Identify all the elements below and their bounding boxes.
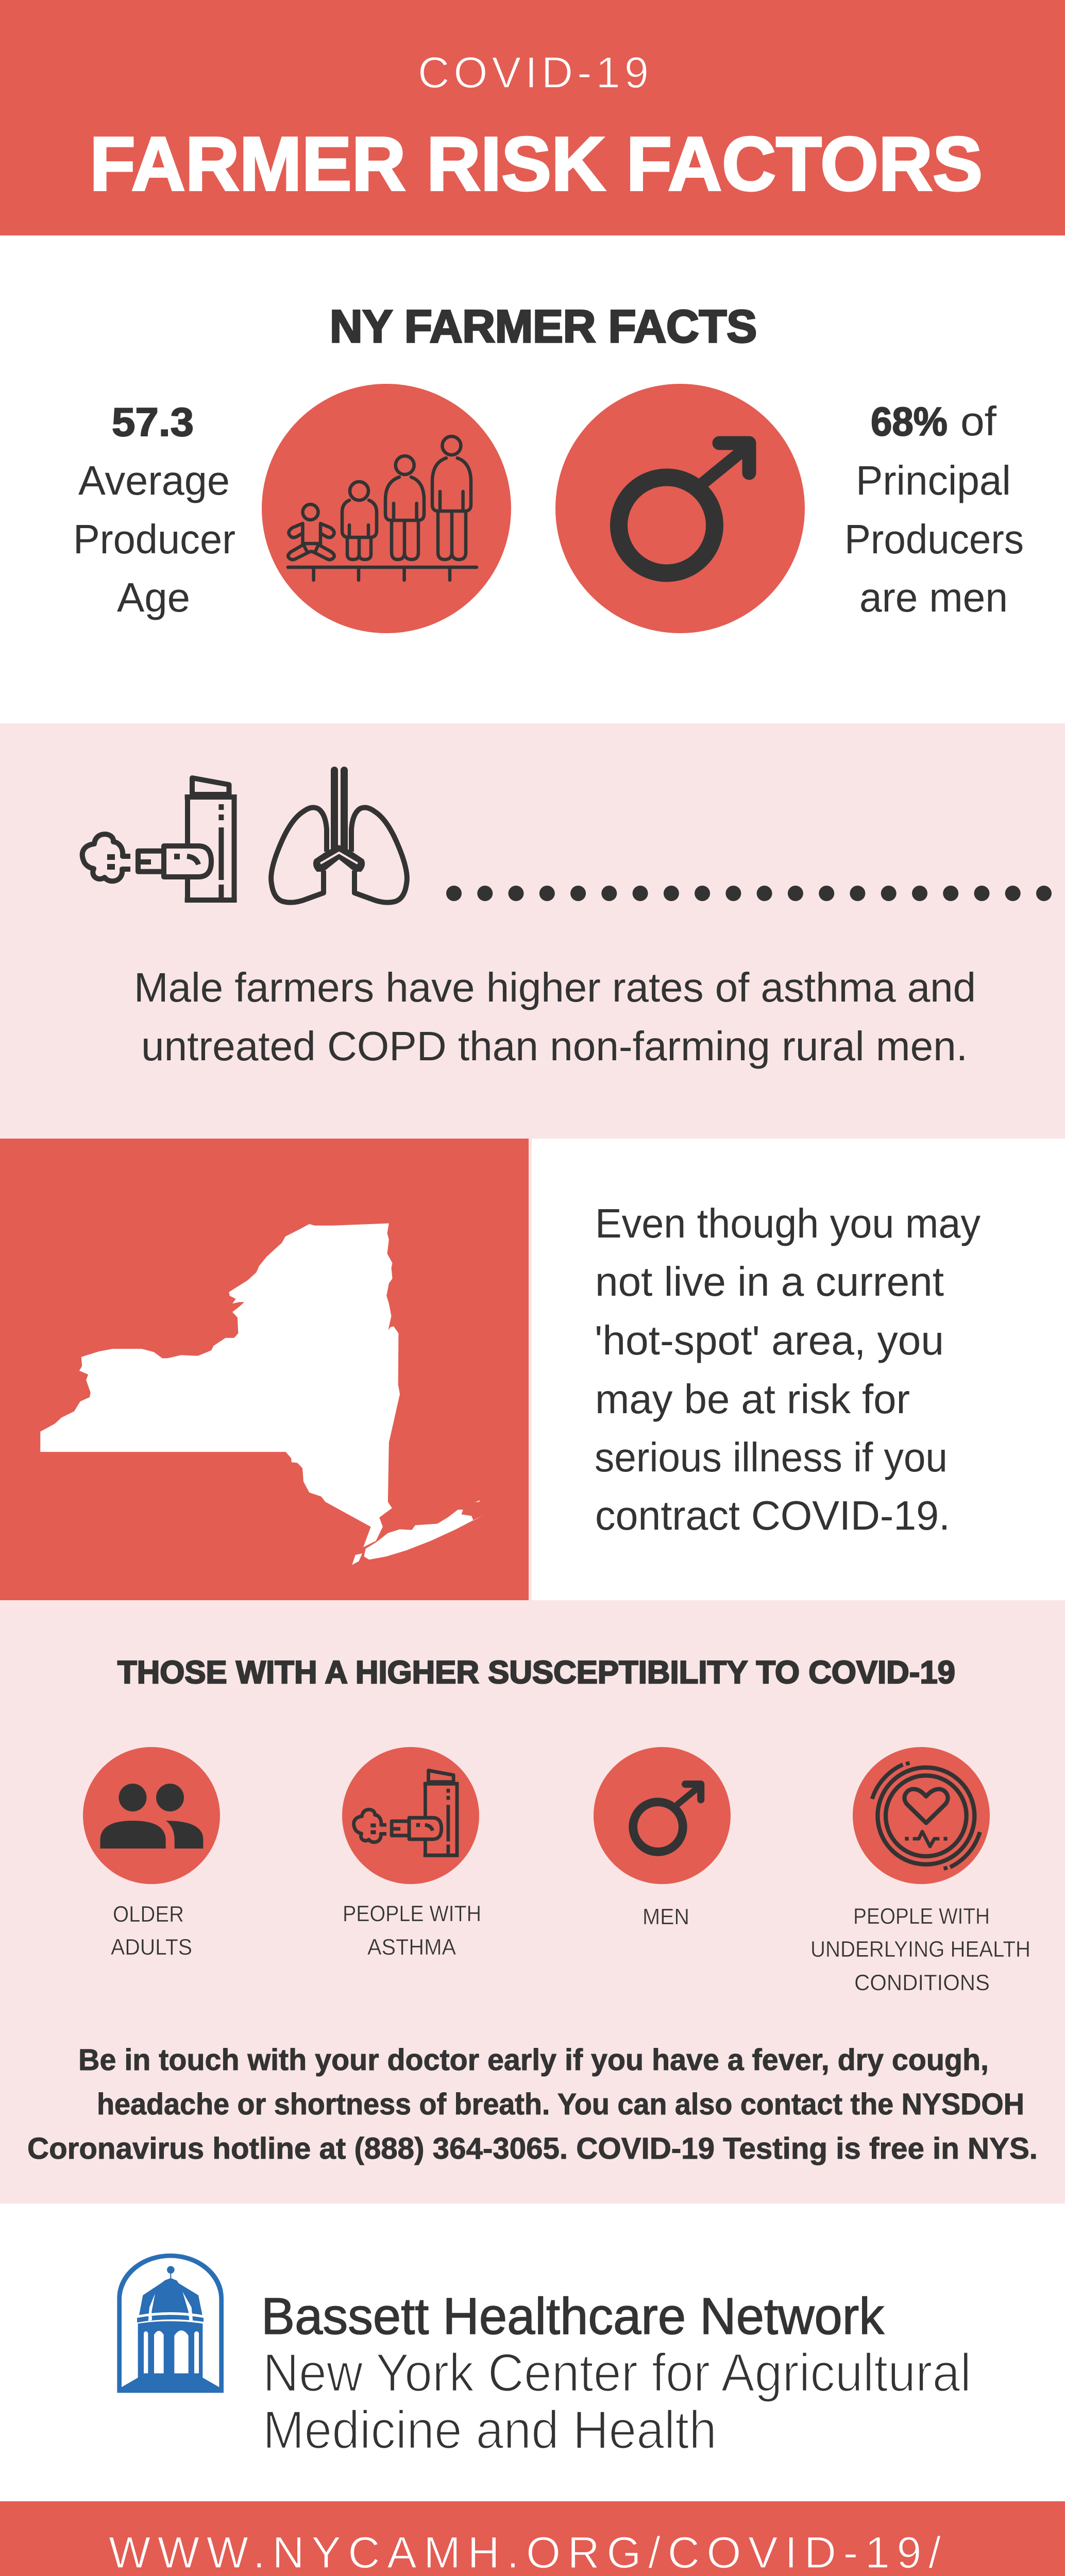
label: underlying health conditions: UNDERLYING HEALTH [810,1937,1030,1962]
icon: people with asthma [342,1747,479,1884]
text block: hot-spot warning: may be at risk for [595,1376,910,1422]
label: people with asthma [343,1901,481,1960]
icon: male symbol in circle [555,384,805,633]
map: New York State [40,1224,484,1565]
callout: contact your doctor: Be in touch with your doctor early if you have a fever, dry cough, [78,2043,989,2077]
text block: hot-spot warning: serious illness if you [595,1434,948,1480]
icon: underlying health conditions [853,1747,990,1884]
text block: average producer age: Age [117,574,190,620]
teen figure [385,456,424,560]
text block: hot-spot warning: 'hot-spot' area, you [595,1317,944,1363]
label: underlying health conditions: PEOPLE WITH [853,1904,990,1929]
logo: Bassett Healthcare Network [117,2253,971,2460]
label: people with asthma: ASTHMA [367,1935,457,1960]
icon: men [594,1747,731,1884]
panel: NY farmer facts [73,300,1024,633]
icon: growth stages in circle [262,384,511,633]
label: underlying health conditions [810,1904,1030,1995]
text block: principal producers [844,398,1024,620]
label: older adults: ADULTS [111,1935,192,1960]
baby figure [288,504,334,560]
child figure [342,482,377,560]
adult figure [432,436,471,560]
icon: lungs [271,770,407,903]
text block: average producer age: 57.3 [112,399,194,445]
dotted line [446,886,1052,901]
text block: average producer age: Average [78,457,230,503]
text: organisation name: Bassett Healthcare Network [261,2287,885,2345]
text block: principal producers: are men [859,574,1008,620]
icon: older adults [83,1747,220,1884]
text block: average producer age [73,399,235,620]
label: older adults [111,1902,192,1960]
label: men: MEN [643,1904,689,1929]
subtitle: COVID-19: COVID-19 [418,48,649,97]
callout: contact your doctor: Coronavirus hotline at (888) 364-3065. COVID-19 Testing is free in NYS. [27,2132,1038,2165]
text block: hot-spot warning: contract COVID-19. [595,1493,950,1538]
text block: hot-spot warning [595,1200,981,1538]
panel: asthma and COPD [0,723,1065,1139]
panel: higher susceptibility [0,1600,1065,2204]
text: center name [263,2343,971,2460]
label: older adults: OLDER [113,1902,184,1927]
icon: inhaler [82,778,237,903]
text block: principal producers: Producers [844,516,1024,562]
text: center name: Medicine and Health [263,2400,717,2460]
ground line with ticks [288,567,477,580]
text block: principal producers: 68% [871,399,948,444]
text block: male farmers statement [134,964,976,1069]
title: Farmer Risk Factors: FARMER RISK FACTORS [90,122,983,207]
panel: footer [0,2501,1065,2576]
callout: contact your doctor [27,2043,1038,2165]
text: center name: New York Center for Agricultural [263,2343,971,2403]
callout: contact your doctor: headache or shortness of breath. You can also contact the NYSDOH [97,2088,1024,2121]
text block: male farmers statement: Male farmers have higher rates of asthma and [134,964,976,1010]
heading: NY Farmer Facts: NY FARMER FACTS [330,300,757,352]
text block: principal producers: Principal [856,457,1011,503]
icon: cupola arch [117,2253,224,2393]
text block: hot-spot warning: Even though you may [595,1200,981,1246]
label: people with asthma: PEOPLE WITH [343,1901,481,1926]
panel: New York map [0,1139,532,1600]
text block: average producer age: Producer [73,516,235,562]
heading: higher susceptibility: THOSE WITH A HIGHER SUSCEPTIBILITY TO COVID-19 [117,1655,955,1690]
label: underlying health conditions: CONDITIONS [854,1970,990,1995]
text block: principal producers: of [960,398,997,444]
text block: hot-spot warning: not live in a current [595,1259,944,1304]
text block: male farmers statement: untreated COPD than non-farming rural men. [141,1023,968,1069]
panel: header [0,0,1065,235]
